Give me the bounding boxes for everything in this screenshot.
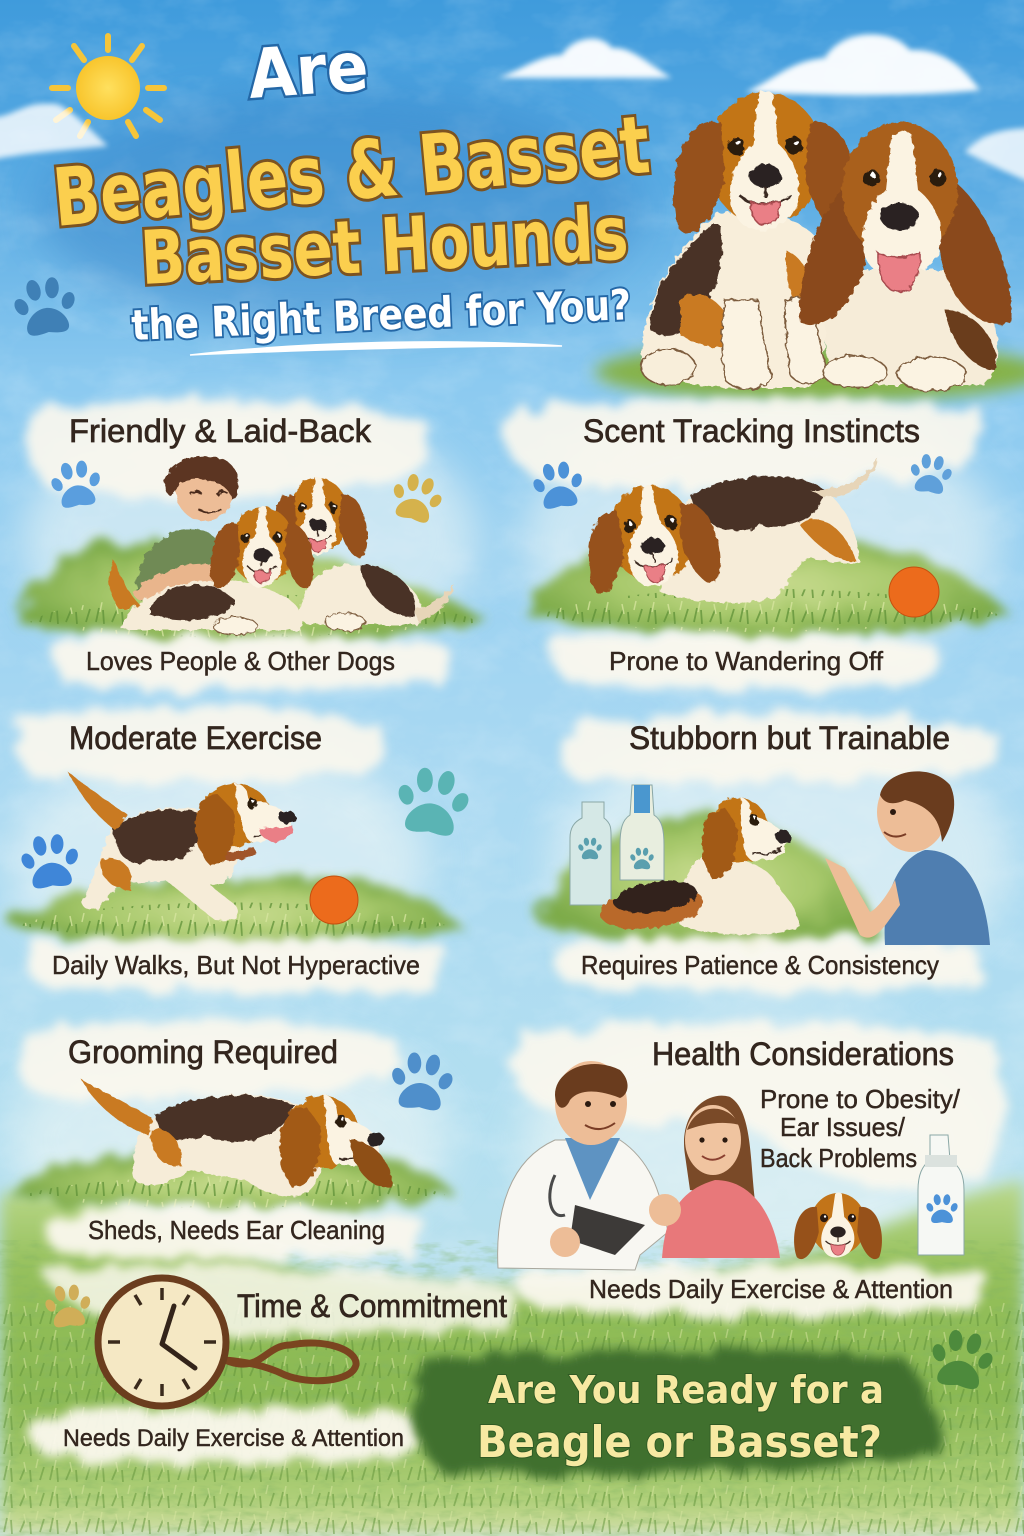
- icon: grooming brush: [598, 876, 706, 935]
- caption cloud: [514, 1264, 988, 1316]
- grass patch: [520, 534, 1010, 637]
- banner line 2: Beagle or Basset?: [477, 1417, 882, 1468]
- heading: Scent Tracking Instincts: [583, 413, 920, 449]
- caption: Loves People & Other Dogs: [86, 646, 395, 676]
- caption: Prone to Wandering Off: [609, 646, 884, 676]
- icon: shampoo bottles: [570, 785, 664, 905]
- grass patch: [15, 542, 490, 641]
- basset hound: [799, 122, 1011, 391]
- health list: Prone to Obesity/: [760, 1084, 961, 1114]
- title: [49, 28, 653, 355]
- icon: puppy: [794, 1192, 882, 1259]
- heading cloud: [561, 713, 998, 782]
- caption cloud: [25, 938, 448, 993]
- heading cloud: [511, 1023, 1002, 1188]
- panel: health considerations: [498, 1023, 1002, 1316]
- caption: Sheds, Needs Ear Cleaning: [88, 1215, 385, 1245]
- icon: clock: [98, 1278, 226, 1406]
- grass patch: [5, 877, 460, 946]
- grass patch: [540, 814, 880, 945]
- caption: Requires Patience & Consistency: [581, 950, 939, 980]
- caption: Daily Walks, But Not Hyperactive: [52, 950, 420, 980]
- caption: Needs Daily Exercise & Attention: [63, 1425, 404, 1452]
- caption cloud: [549, 635, 938, 690]
- icon: paw: [17, 831, 83, 890]
- health list: [760, 1084, 961, 1173]
- panel: grooming required: [10, 1020, 458, 1260]
- heading cloud: [502, 399, 987, 489]
- beagle: [641, 91, 857, 389]
- icon: woman: [649, 1096, 780, 1258]
- dark blue haze behind title: [40, 90, 640, 330]
- panel: moderate exercise: [5, 705, 460, 993]
- title line: Are: Are: [246, 28, 371, 115]
- icon: veterinarian: [498, 1061, 668, 1270]
- heading: Time & Commitment: [237, 1288, 507, 1324]
- icon: paw: [42, 1283, 94, 1329]
- heading: Moderate Exercise: [69, 720, 322, 756]
- panel: stubborn but trainable: [540, 713, 998, 993]
- call to action banner: [411, 1350, 943, 1475]
- icon: paw teal: [391, 763, 475, 839]
- caption: Needs Daily Exercise & Attention: [589, 1274, 953, 1304]
- icon: orange ball: [310, 876, 358, 924]
- panel: friendly and laid-back: [15, 400, 490, 690]
- grass patch: [10, 1155, 455, 1210]
- title underline: [190, 342, 562, 355]
- icon: orange ball: [889, 567, 939, 617]
- heading: Grooming Required: [68, 1034, 338, 1070]
- icon: ear cleaner bottle: [918, 1135, 964, 1255]
- icon: paws: [47, 457, 448, 527]
- caption cloud: [45, 1208, 424, 1260]
- panel: scent tracking instincts: [502, 399, 1010, 690]
- heading cloud: [19, 705, 387, 782]
- caption cloud: [28, 1408, 419, 1463]
- grass blades: [30, 594, 480, 637]
- panel: time and commitment: [28, 1265, 516, 1463]
- health list: Ear Issues/: [780, 1112, 906, 1142]
- icon: dog lying with head up: [679, 798, 799, 935]
- icon: paw green: [925, 1325, 999, 1392]
- icon: sniffing dog: [581, 458, 878, 603]
- icon: paws: [529, 451, 956, 511]
- icon: walking dog: [68, 772, 299, 920]
- heading: Friendly & Laid-Back: [69, 413, 372, 449]
- icon: crouching dog: [82, 1080, 392, 1196]
- soft white haze behind panels: [10, 405, 1010, 1260]
- heading: Stubborn but Trainable: [629, 720, 950, 756]
- title line: the Right Breed for You?: the Right Breed for You?: [130, 280, 632, 350]
- decorative paw prints: [9, 273, 999, 1392]
- sun icon: [52, 36, 164, 136]
- banner background: [411, 1350, 943, 1475]
- grass blades: [20, 902, 445, 939]
- icon: paw: [386, 1049, 458, 1112]
- banner line 1: Are You Ready for a: [488, 1368, 884, 1412]
- grass mound: [595, 342, 1024, 402]
- heading: Health Considerations: [652, 1036, 954, 1072]
- heading cloud: [17, 1020, 399, 1098]
- hero: beagle and basset hound: [595, 91, 1024, 402]
- heading band: [40, 1265, 516, 1335]
- caption cloud: [553, 938, 978, 993]
- title line: Beagles & Basset: Beagles & Basset: [49, 98, 653, 245]
- caption cloud: [53, 635, 446, 690]
- heading cloud: [26, 400, 430, 499]
- clouds: [0, 34, 1024, 184]
- meadow background: [0, 1180, 1024, 1536]
- title line: Basset Hounds: Basset Hounds: [138, 191, 630, 302]
- grass blades: [25, 1176, 445, 1208]
- icon: paw blue top left: [9, 273, 82, 338]
- icon: trainer: [825, 771, 990, 945]
- grass blades: [540, 589, 1000, 632]
- icon: leash: [225, 1343, 356, 1381]
- health list: Back Problems: [760, 1143, 917, 1173]
- boy and two dogs: [109, 456, 455, 635]
